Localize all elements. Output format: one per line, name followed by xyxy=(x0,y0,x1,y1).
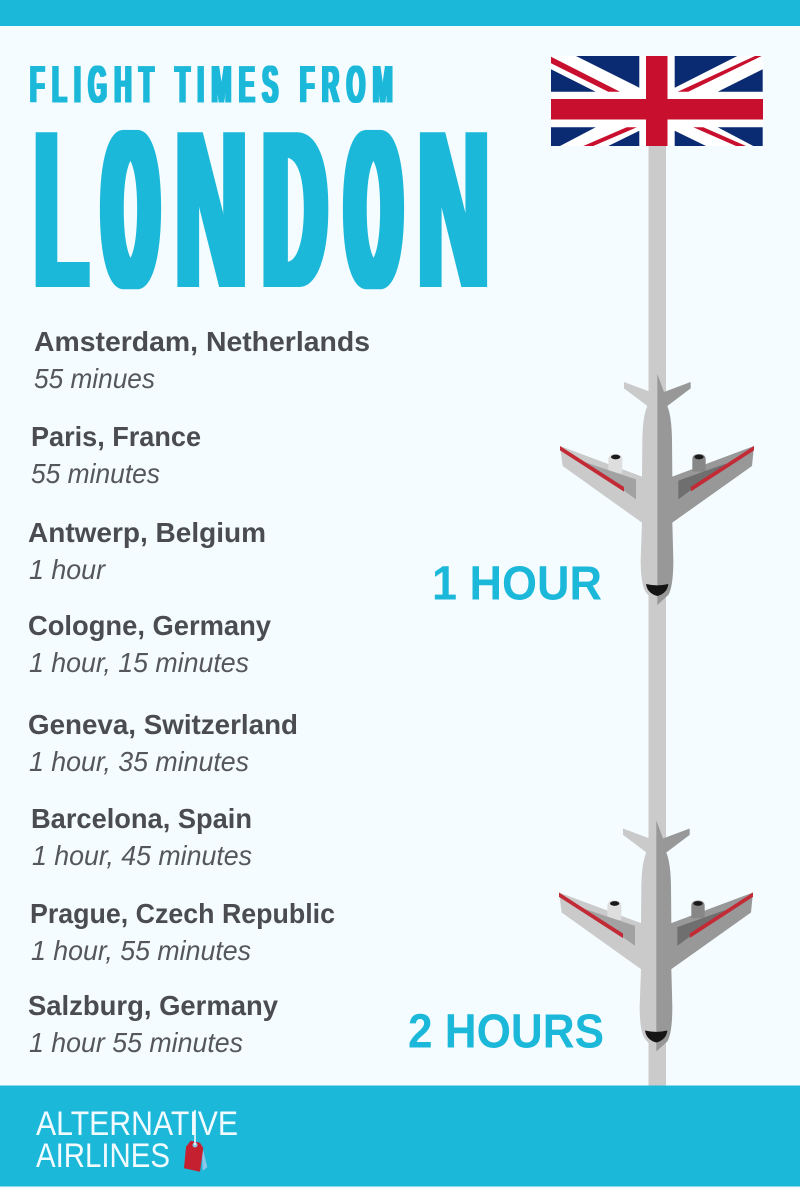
Cologne: 1 hour, 15 minutes xyxy=(29,647,249,678)
Paris xyxy=(31,421,201,489)
title: flight times from: FLIGHT TIMES FROM xyxy=(30,55,400,114)
Salzburg: 1 hour 55 minutes xyxy=(29,1027,243,1058)
icon: plane two xyxy=(559,820,753,1051)
title: London: N xyxy=(418,84,489,335)
Geneva xyxy=(28,709,298,777)
Amsterdam: 55 minues xyxy=(34,363,155,394)
Barcelona xyxy=(31,803,252,871)
Antwerp: 1 hour xyxy=(29,554,107,585)
title: London: D xyxy=(264,85,326,336)
Paris: Paris, France xyxy=(31,421,201,452)
title: London: N xyxy=(175,83,247,335)
label: 1 hour: 1 HOUR xyxy=(432,558,602,610)
Geneva: 1 hour, 35 minutes xyxy=(29,746,249,777)
destination list xyxy=(28,326,370,1058)
Amsterdam: Amsterdam, Netherlands xyxy=(34,326,370,357)
title: London: O xyxy=(347,85,400,336)
Cologne: Cologne, Germany xyxy=(28,610,271,641)
Cologne xyxy=(28,610,271,678)
label: 2 hours: 2 HOURS xyxy=(408,1006,604,1058)
flagpole runway line xyxy=(648,146,666,1086)
title: London: L xyxy=(34,84,88,336)
footer band xyxy=(0,1086,800,1186)
logo: Alternative Airlines: ALTERNATIVE xyxy=(36,1105,238,1143)
Antwerp: Antwerp, Belgium xyxy=(28,517,266,548)
title: London xyxy=(34,83,489,336)
Geneva: Geneva, Switzerland xyxy=(28,709,298,740)
Barcelona: 1 hour, 45 minutes xyxy=(32,840,252,871)
icon: plane one xyxy=(560,374,754,605)
icon: luggage tag xyxy=(184,1110,207,1172)
Paris: 55 minutes xyxy=(31,458,160,489)
Prague: 1 hour, 55 minutes xyxy=(31,935,251,966)
logo: Alternative Airlines xyxy=(36,1105,238,1175)
Barcelona: Barcelona, Spain xyxy=(31,803,252,834)
Prague: Prague, Czech Republic xyxy=(30,898,335,929)
Salzburg: Salzburg, Germany xyxy=(28,990,278,1021)
logo: Alternative Airlines: AIRLINES xyxy=(36,1137,170,1175)
Antwerp xyxy=(28,517,266,585)
Prague xyxy=(30,898,335,966)
title: London: O xyxy=(104,85,157,336)
top band xyxy=(0,0,800,26)
Amsterdam xyxy=(34,326,370,394)
icon: union jack flag xyxy=(551,56,763,146)
Salzburg xyxy=(28,990,278,1058)
